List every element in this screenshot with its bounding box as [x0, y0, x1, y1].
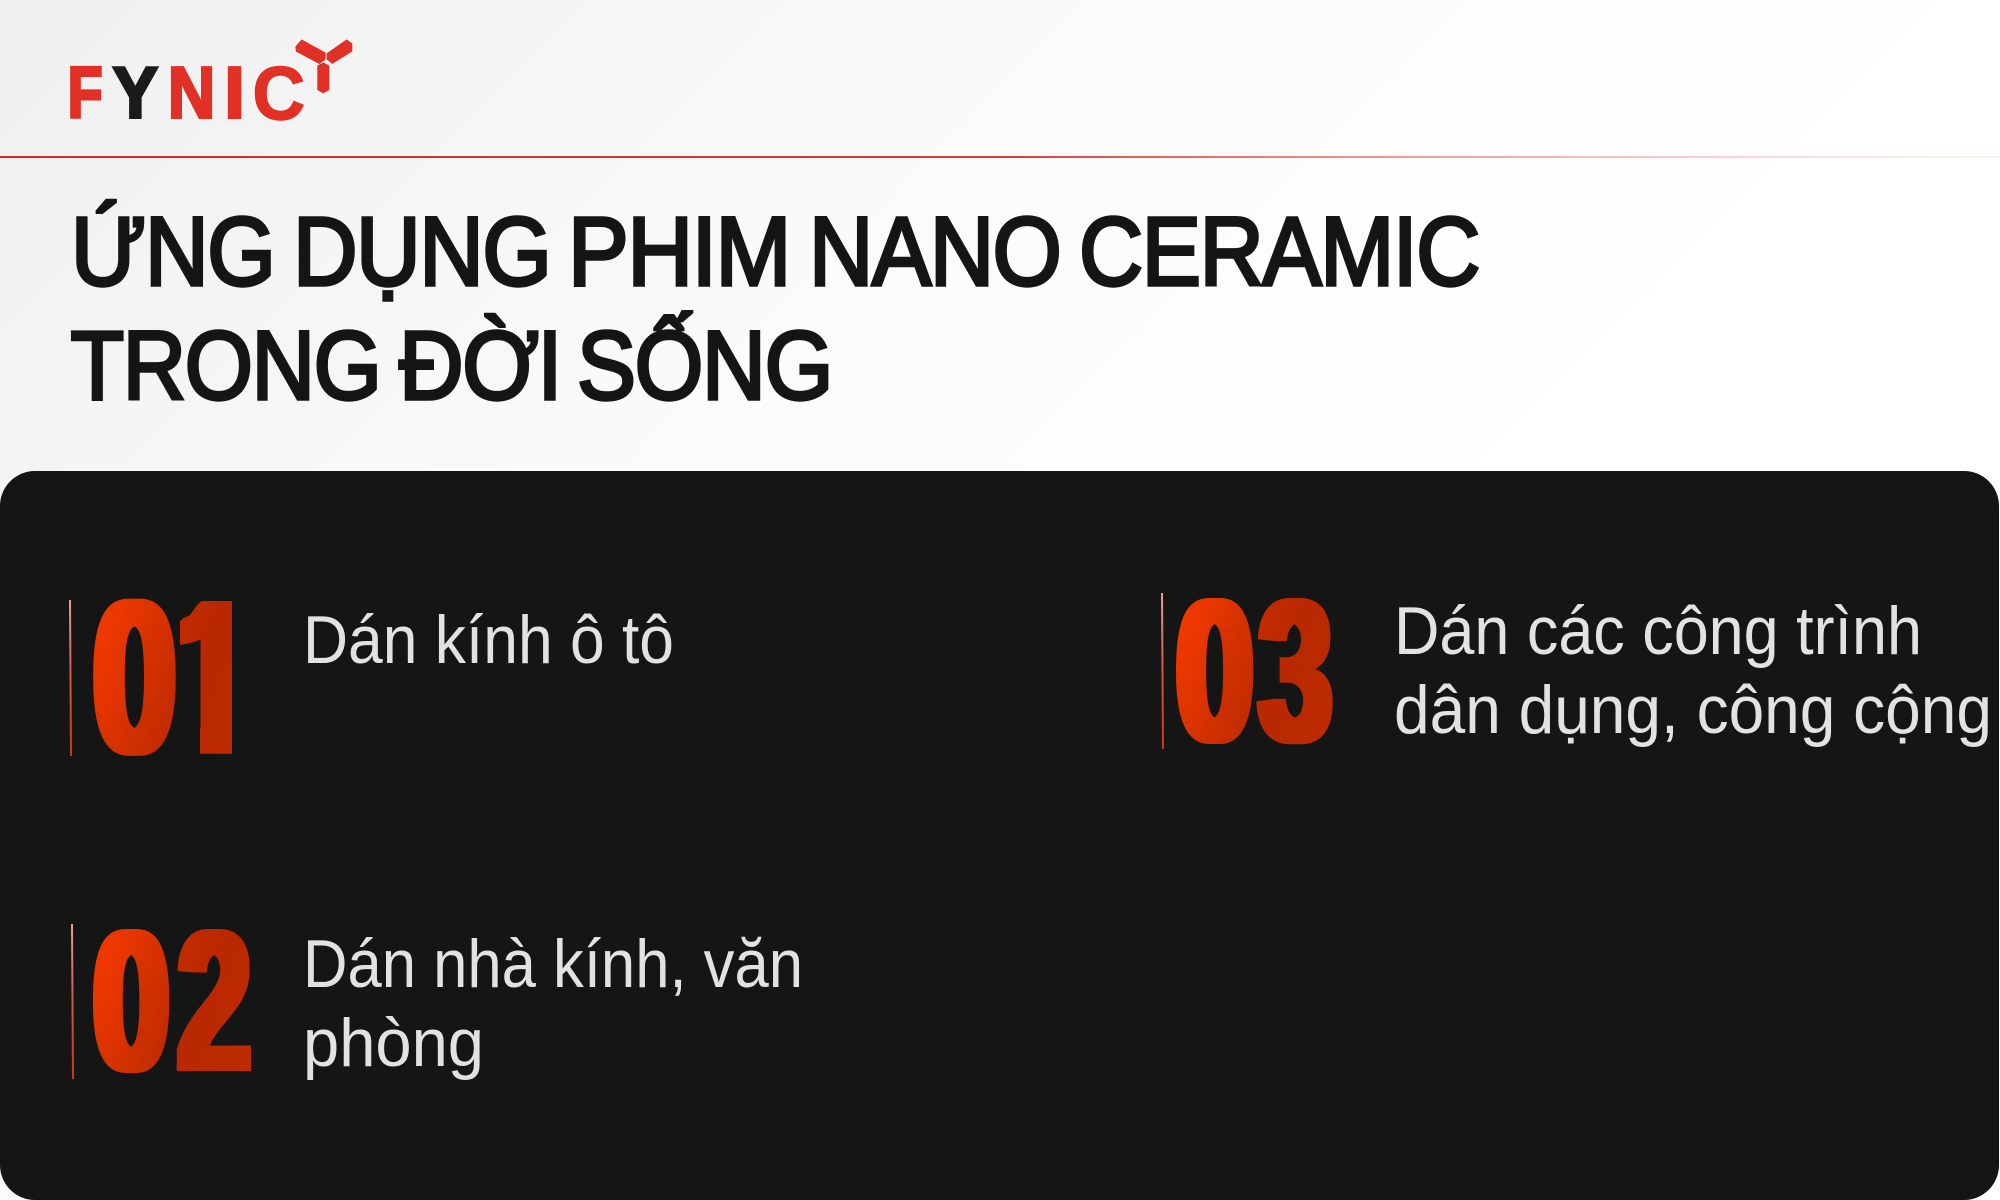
item 02: 2 [178, 889, 251, 1112]
title: SỐNG [577, 311, 832, 420]
item 02: Dán nhà kính, văn [303, 926, 803, 1002]
title: PHIM [568, 197, 790, 306]
item 03 [1161, 558, 1992, 784]
item 01: Dán kính ô tô [303, 602, 674, 678]
title: DỤNG [293, 197, 550, 306]
item 01: 1 [171, 554, 255, 799]
logo: FYNIC: Y [113, 53, 158, 133]
title: CERAMIC [1079, 197, 1479, 306]
logo: FYNIC: F [68, 52, 103, 133]
title: TRONG [70, 311, 380, 420]
item 03: 3 [1259, 559, 1332, 784]
title: ỨNG [71, 197, 274, 306]
item 01 [69, 554, 674, 799]
icon: logo mark [295, 39, 352, 93]
title: NANO [809, 197, 1060, 306]
item 02: 0 [93, 890, 169, 1113]
logo: FYNIC: C [252, 51, 305, 136]
title: ĐỜI [399, 311, 561, 420]
item 03: 0 [1176, 558, 1254, 784]
item 01: 0 [93, 554, 176, 799]
item 02: phòng [303, 1005, 484, 1081]
item 02 [71, 889, 803, 1113]
item 03: Dán các công trình [1394, 593, 1922, 669]
title [70, 197, 1479, 420]
logo: FYNIC: I [224, 54, 245, 134]
logo: FYNIC: N [168, 53, 215, 133]
logo: FYNIC [68, 39, 352, 136]
panel: applications [0, 471, 1999, 1200]
